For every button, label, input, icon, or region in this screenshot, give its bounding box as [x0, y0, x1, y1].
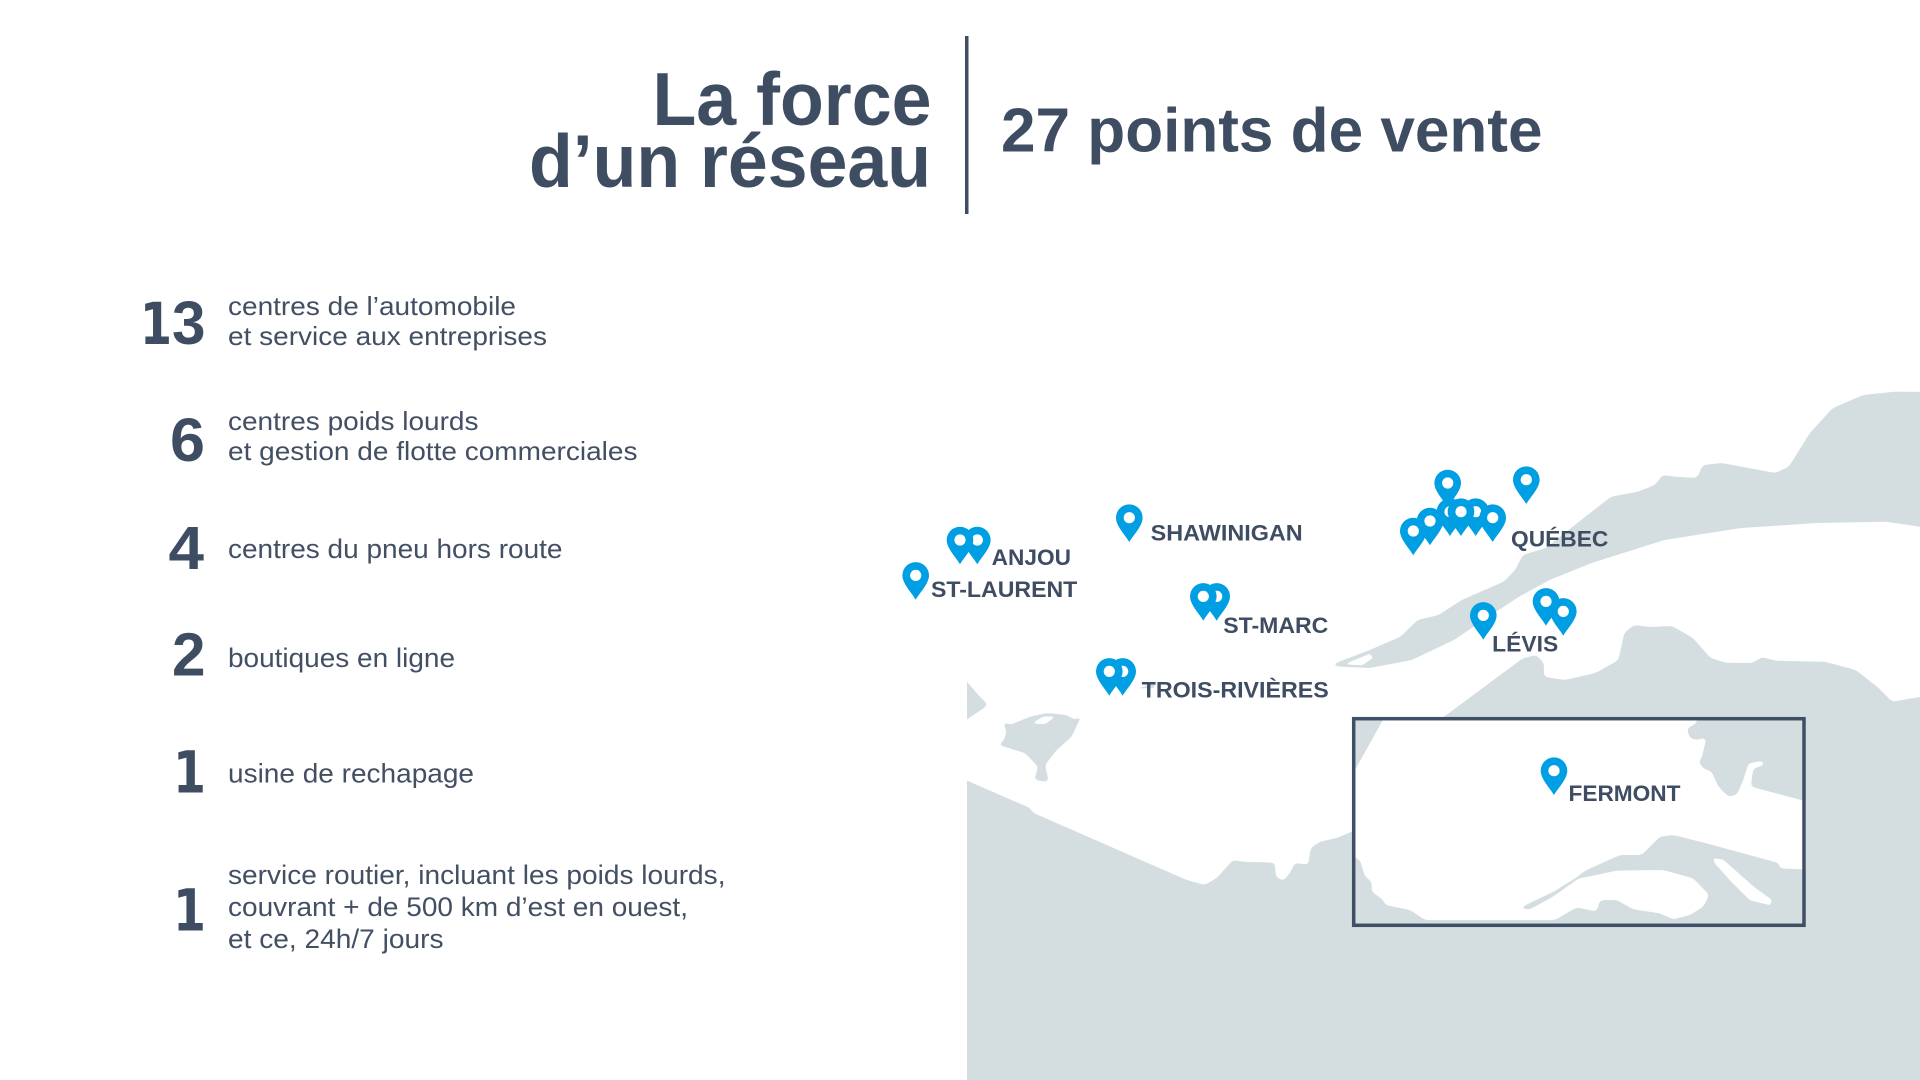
stat: 4 centres du pneu hors route: 4 [168, 514, 204, 582]
pins: Québec cluster [1400, 466, 1540, 555]
stat: 4 centres du pneu hors route [168, 514, 562, 582]
stat: 2 boutiques en ligne: 2 [172, 621, 206, 689]
stat: 1 service routier: couvrant + de 500 km d’est en ouest, [228, 892, 688, 922]
stat: 13 centres de l’automobile [140, 289, 547, 358]
label: Anjou: ANJOU [992, 545, 1071, 570]
stat: 6 centres poids lourds: centres poids lourds [228, 406, 478, 436]
pins: St-Marc [1190, 583, 1230, 621]
title: La force d’un réseau: La force [652, 57, 932, 141]
stat: 2 boutiques en ligne: boutiques en ligne [228, 643, 455, 673]
map: St. Lawrence region [947, 392, 1920, 1080]
map land masses [947, 392, 1920, 1080]
pin: Shawinigan [1116, 504, 1143, 542]
label: St-Marc: ST-MARC [1223, 613, 1328, 638]
stat: 4 centres du pneu hors route: centres du pneu hors route [228, 534, 562, 564]
stat: 1 service routier: 1 [173, 877, 206, 945]
inset background [1352, 717, 1806, 927]
title: La force d’un réseau [529, 57, 932, 203]
title: La force d’un réseau: d’un réseau [529, 119, 931, 203]
stat: 6 centres poids lourds: et gestion de flotte commerciales [228, 436, 638, 466]
pins: Trois-Rivières [1096, 658, 1136, 696]
stat: 13 centres de l’automobile: et service aux entreprises [228, 321, 547, 351]
stat: 1 service routier: service routier, incluant les poids lourds, [228, 860, 726, 890]
map lakes [1033, 654, 1373, 724]
stat: 1 service routier: et ce, 24h/7 jours [228, 924, 444, 954]
pin: St-Laurent [902, 562, 929, 600]
label: Lévis: LÉVIS [1492, 632, 1558, 657]
subtitle: 27 points de vente: 27 points de vente [1001, 97, 1542, 166]
pins: Lévis [1470, 588, 1577, 640]
stat: 13 centres de l’automobile: centres de l’automobile [228, 291, 516, 321]
stat: 6 centres poids lourds: 6 [170, 406, 205, 474]
label: Trois-Rivières: TROIS-RIVIÈRES [1142, 677, 1329, 702]
stat: 1 usine de rechapage [173, 739, 474, 807]
label: Fermont: FERMONT [1568, 781, 1681, 806]
title divider [965, 36, 968, 214]
map land: sliver near Trois-Rivières [1138, 683, 1157, 688]
stat: 1 service routier [173, 860, 726, 954]
stat: 1 usine de rechapage: 1 [173, 739, 206, 807]
label: St-Laurent: ST-LAURENT [931, 577, 1078, 602]
label: Québec: QUÉBEC [1511, 527, 1608, 552]
inset box: Fermont map [1352, 716, 1806, 928]
stat: 2 boutiques en ligne [172, 621, 455, 689]
label: Shawinigan: SHAWINIGAN [1151, 521, 1303, 546]
inset land [1356, 717, 1806, 927]
inset frame [1354, 719, 1804, 925]
stat: 13 centres de l’automobile: 1 [140, 290, 172, 358]
pin: Fermont [1541, 757, 1567, 795]
stat: 13 centres de l’automobile: 3 [172, 289, 206, 357]
stat: 6 centres poids lourds [170, 406, 638, 474]
stat: 1 usine de rechapage: usine de rechapage [228, 759, 474, 789]
pins: Anjou [947, 527, 991, 564]
